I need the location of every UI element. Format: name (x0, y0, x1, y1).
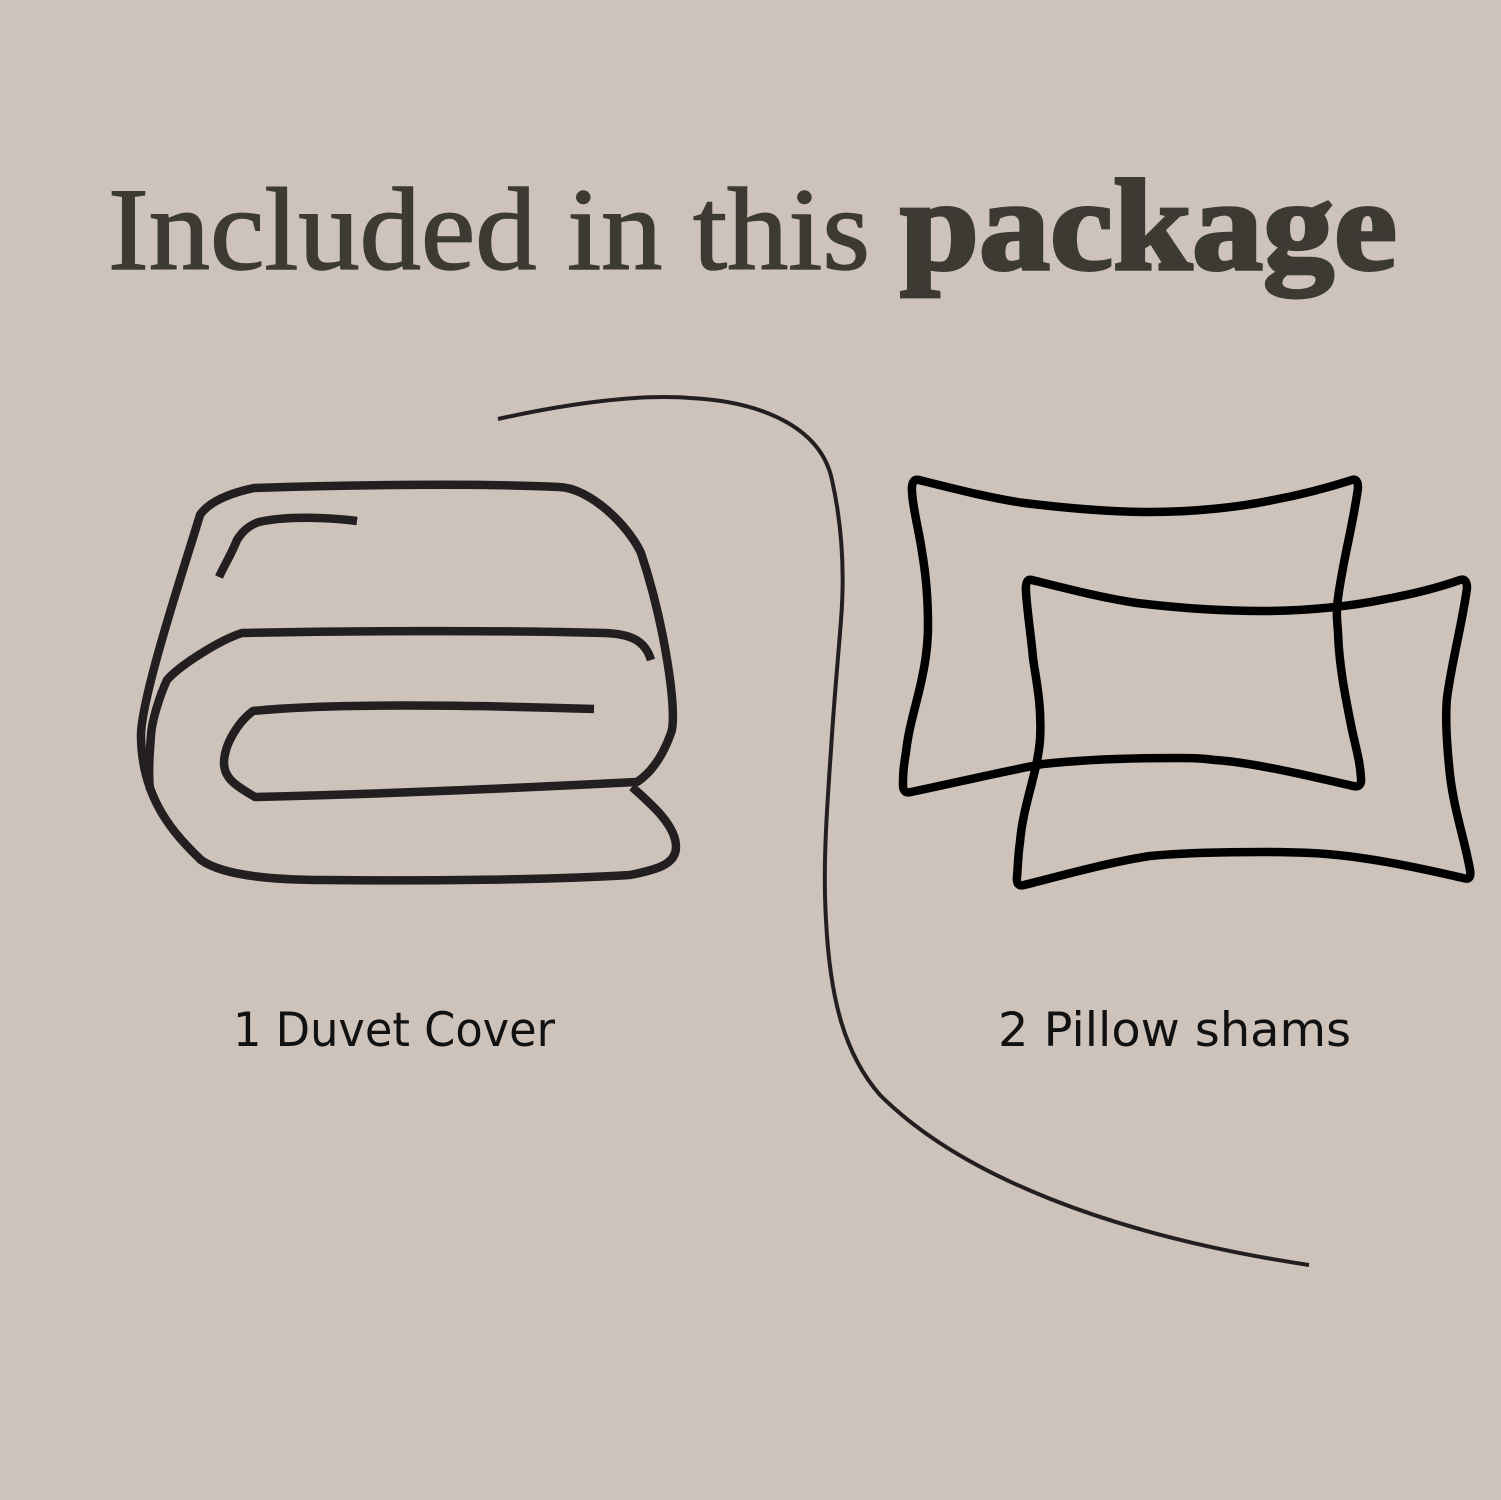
back pillow (903, 480, 1361, 792)
duvet middle fold (149, 631, 651, 790)
icon: two pillow shams (903, 480, 1470, 885)
title (108, 154, 1397, 298)
icon: folded duvet (141, 485, 676, 880)
duvet outer outline (141, 485, 676, 880)
title: bold part: package (900, 154, 1397, 298)
label: pillow shams: 2 Pillow shams (998, 1003, 1351, 1058)
curved divider line (498, 397, 1309, 1265)
front pillow (1017, 580, 1470, 885)
title: regular part: Included in this (108, 164, 870, 295)
label: duvet cover: 1 Duvet Cover (233, 1003, 556, 1058)
duvet top corner crease (219, 518, 357, 577)
